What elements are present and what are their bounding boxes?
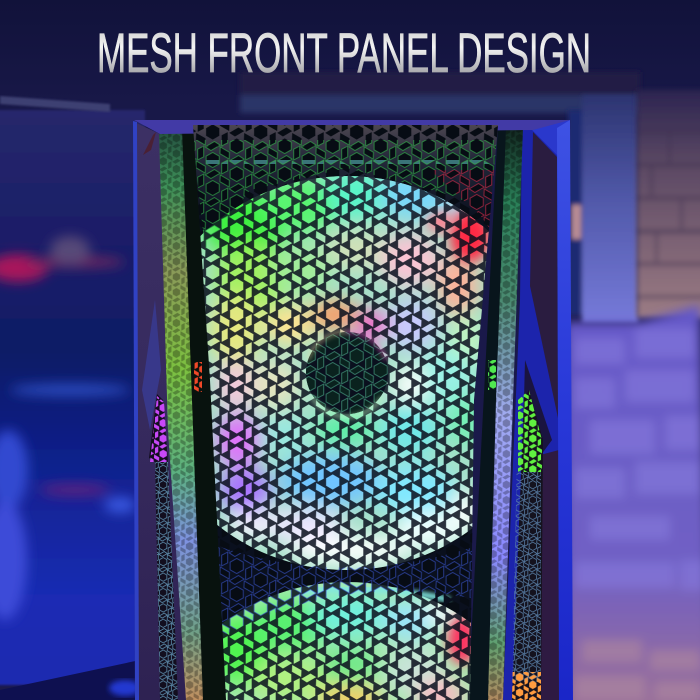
fan 1 RGB ring (200, 176, 489, 570)
case: top edge strip (134, 120, 570, 134)
LED slot right (488, 360, 496, 390)
background: stone wall lower right (565, 305, 700, 700)
mesh metal plate (180, 120, 510, 700)
lit strip under fan 1 (300, 589, 450, 600)
LED slot left (194, 362, 202, 392)
case: right side vent with green glow (510, 390, 544, 700)
case: left reflective side panel (159, 129, 204, 700)
case: right pillar blue frame (503, 120, 573, 700)
case: left pillar (133, 121, 188, 700)
background: monitor on left (0, 96, 145, 700)
glowing hole outlines in the dark areas (193, 140, 498, 640)
background: brick wall upper right (637, 90, 700, 318)
dark interior (193, 125, 498, 622)
case: right reflective side panel (488, 128, 523, 700)
front mesh panel with RGB fans (193, 125, 498, 700)
case: left black gap (182, 125, 230, 700)
perforations showing fans behind (193, 125, 498, 700)
horizontal bracket light (205, 160, 490, 164)
hub rim glow (308, 332, 386, 417)
case: right black gap (468, 125, 508, 700)
case: left side vent with purple glow (149, 394, 178, 700)
fan 2 RGB ring (222, 582, 471, 700)
background: white wall panel (568, 95, 638, 323)
fan 1 hub dark centre (306, 332, 388, 414)
background: blurred shelf above the case (240, 72, 640, 113)
case: full tower body (133, 120, 573, 700)
metal tinted by fan light (200, 176, 488, 700)
